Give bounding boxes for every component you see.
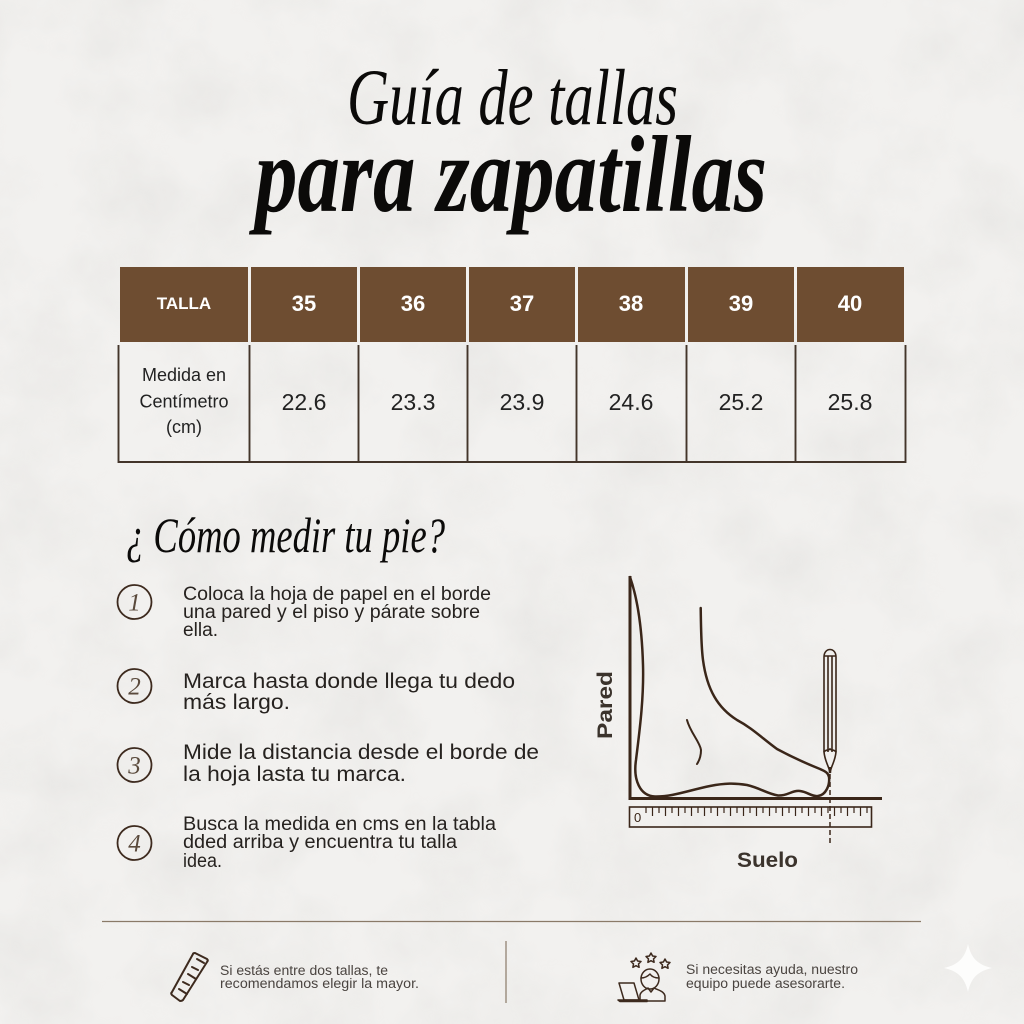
step 4 text: idea. bbox=[183, 851, 222, 872]
wall and floor lines bbox=[630, 576, 882, 798]
table measurement row: Medida en bbox=[142, 365, 226, 385]
step 3 text bbox=[183, 741, 539, 786]
size table bbox=[118, 267, 906, 462]
foot measuring diagram bbox=[594, 576, 882, 872]
icon: support agent with stars bbox=[618, 953, 670, 1002]
title: para zapatillas bbox=[249, 114, 767, 235]
table measurement row: 24.6 bbox=[609, 389, 653, 415]
table measurement row: 25.2 bbox=[719, 389, 763, 415]
step 3 bbox=[118, 741, 539, 786]
table header row: 39 bbox=[729, 291, 753, 316]
title: Guía de tallas bbox=[347, 55, 678, 142]
table header row: 36 bbox=[401, 291, 425, 316]
table measurement row bbox=[118, 345, 906, 462]
table header row: 37 bbox=[510, 291, 534, 316]
icon: ruler bbox=[171, 953, 208, 1001]
table measurement row: 23.3 bbox=[391, 389, 435, 415]
step 1 text: una pared y el piso y párate sobre bbox=[183, 602, 480, 623]
step 1 bbox=[118, 584, 491, 641]
table measurement row: 25.8 bbox=[828, 389, 872, 415]
dashed measure line bbox=[829, 774, 831, 843]
label: floor: Suelo bbox=[737, 849, 798, 872]
step 4 number badge: 4 bbox=[128, 830, 141, 858]
step 1 text: ella. bbox=[183, 620, 218, 641]
step 2 bbox=[118, 669, 515, 714]
foot outline bbox=[630, 577, 829, 797]
label: wall: Pared bbox=[594, 671, 617, 739]
table measurement row: 23.9 bbox=[500, 389, 544, 415]
sparkle mark bbox=[944, 944, 992, 992]
step 4 text bbox=[183, 814, 496, 872]
tip text: Si necesitas ayuda, nuestro bbox=[686, 962, 858, 977]
step 3 text: la hoja lasta tu marca. bbox=[183, 763, 406, 786]
step 2 number badge bbox=[118, 669, 152, 703]
table header row: TALLA bbox=[157, 294, 211, 313]
table measurement row: Centímetro bbox=[139, 392, 229, 412]
table header row: 35 bbox=[292, 291, 316, 316]
step 2 number badge: 2 bbox=[128, 674, 141, 700]
step 3 number badge bbox=[118, 748, 152, 782]
ankle line bbox=[687, 720, 701, 764]
section heading: ¿ Cómo medir tu pie? bbox=[126, 507, 445, 563]
ruler bbox=[630, 807, 872, 827]
step 4 bbox=[118, 814, 496, 872]
tip text bbox=[220, 963, 419, 991]
title bbox=[249, 55, 767, 235]
step 1 text bbox=[183, 584, 491, 641]
step 2 text bbox=[183, 670, 515, 714]
tip text: equipo puede asesorarte. bbox=[686, 976, 845, 991]
ruler: 0 bbox=[634, 810, 641, 825]
tip text: Si estás entre dos tallas, te bbox=[220, 963, 388, 978]
footer tip: support bbox=[618, 953, 858, 1002]
table measurement row: 22.6 bbox=[282, 389, 326, 415]
step 1 number badge: 1 bbox=[128, 590, 141, 616]
footer vertical divider bbox=[505, 941, 507, 1003]
step 1 number badge bbox=[118, 585, 152, 619]
table measurement row: (cm) bbox=[166, 417, 202, 437]
tip text: recomendamos elegir la mayor. bbox=[220, 976, 419, 991]
table header row bbox=[120, 267, 904, 342]
step 2 text: Marca hasta donde llega tu dedo bbox=[183, 670, 515, 693]
step 3 text: Mide la distancia desde el borde de bbox=[183, 741, 539, 764]
step 3 number badge: 3 bbox=[127, 752, 141, 780]
step 1 text: Coloca la hoja de papel en el borde bbox=[183, 584, 491, 605]
step 2 text: más largo. bbox=[183, 691, 290, 714]
footer divider bbox=[102, 920, 921, 922]
footer tip: ruler bbox=[171, 953, 419, 1001]
table header row: 38 bbox=[619, 291, 643, 316]
pencil bbox=[824, 650, 836, 773]
table header row: 40 bbox=[838, 291, 862, 316]
step 4 text: dded arriba y encuentra tu talla bbox=[183, 832, 457, 853]
tip text bbox=[686, 962, 858, 991]
step 4 text: Busca la medida en cms en la tabla bbox=[183, 814, 496, 835]
step 4 number badge bbox=[118, 826, 152, 860]
